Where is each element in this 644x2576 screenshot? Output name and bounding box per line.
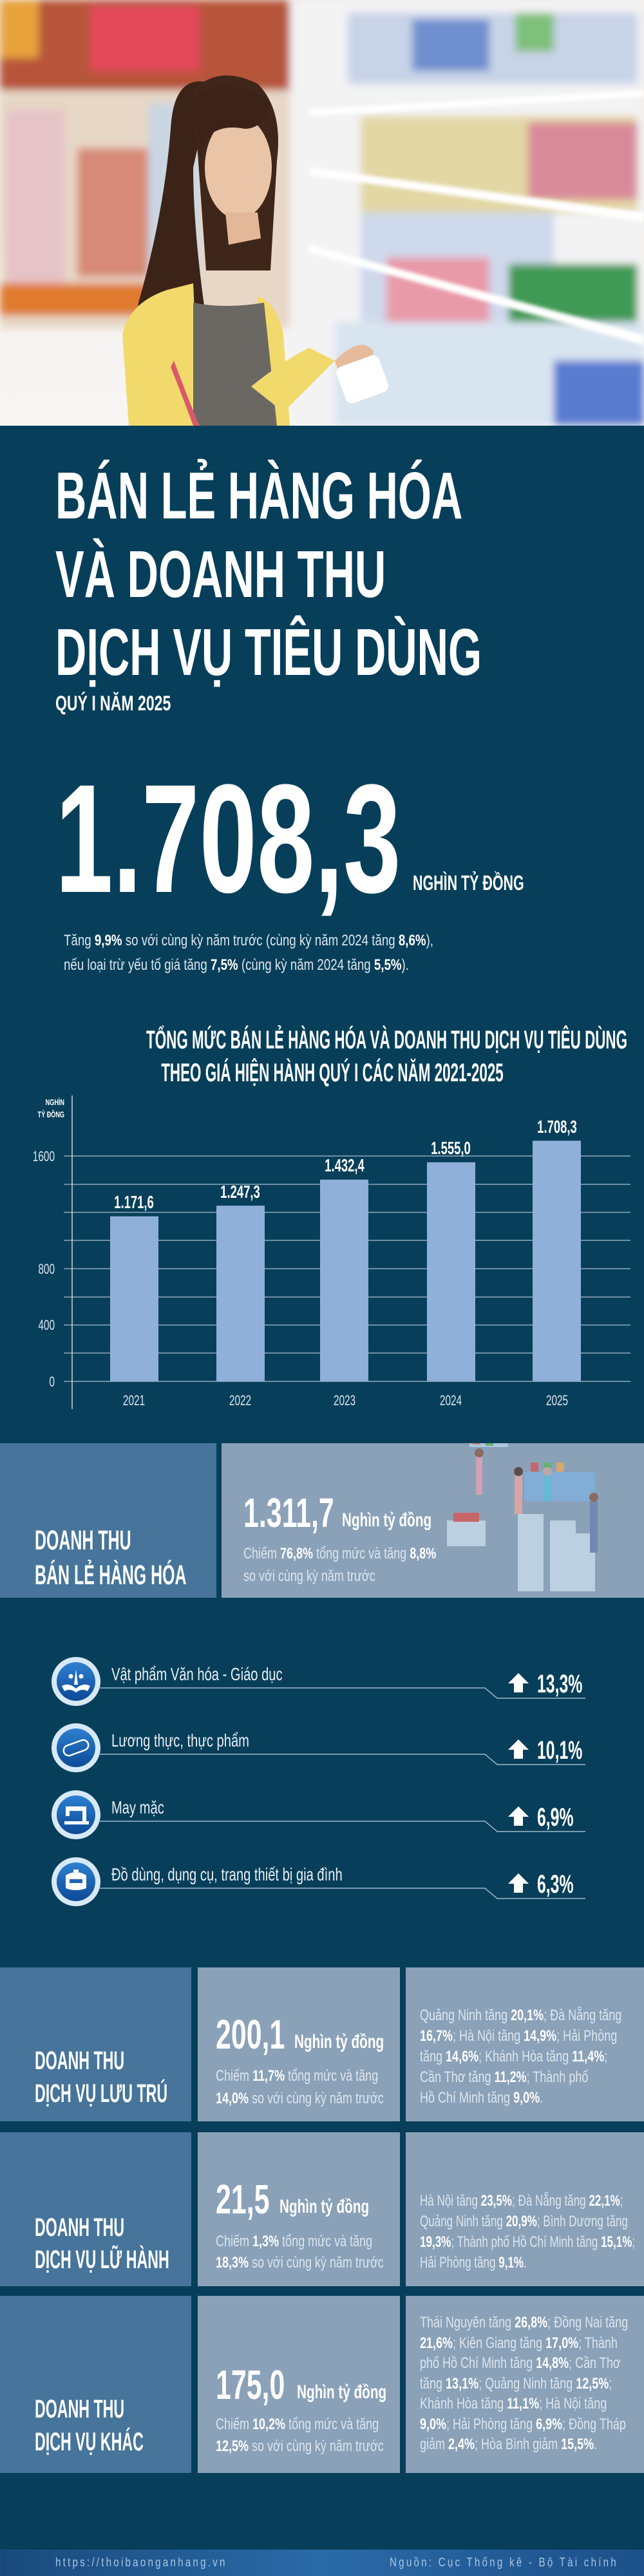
value labels: 1.247,3 <box>220 1182 260 1202</box>
y labels: 1600 <box>33 1149 55 1165</box>
title <box>55 459 482 689</box>
value labels: 1.555,0 <box>431 1139 471 1159</box>
description: so với cùng kỳ năm trước <box>243 1567 375 1585</box>
item list: retail categories <box>52 1657 585 1906</box>
panel: travel provinces: Hà Nội tăng 23,5%; Đà Nẵng tăng 22,1%; <box>420 2192 623 2210</box>
panel: travel figure: 18,3% so với cùng kỳ năm trước <box>216 2254 384 2271</box>
panel: accommodation title: DOANH THU <box>35 2047 124 2075</box>
woman <box>122 75 390 426</box>
value labels <box>114 1117 577 1213</box>
panel: accommodation figure: 14,0% so với cùng kỳ năm trước <box>216 2090 384 2107</box>
item labels: Vật phẩm Văn hóa - Giáo dục <box>111 1664 283 1684</box>
hero photo: woman shopping in supermarket <box>0 0 644 426</box>
panel: other services provinces: tăng 13,1%; Quảng Ninh tăng 12,5%; <box>420 2375 612 2392</box>
title: BÁN LẺ HÀNG HÓA <box>55 459 462 533</box>
panel: other services title <box>0 2296 191 2473</box>
y labels: 0 <box>49 1374 55 1390</box>
chart title <box>146 1025 627 1087</box>
title: VÀ DOANH THU <box>55 537 386 611</box>
year labels: 2023 <box>334 1393 355 1409</box>
panel: accommodation title <box>0 1967 191 2121</box>
growth note <box>64 932 433 974</box>
panel: other services figure: 175,0 <box>216 2362 285 2408</box>
year labels <box>123 1393 568 1409</box>
panel: other services figure: Nghìn tỷ đồng <box>297 2382 386 2403</box>
bars <box>110 1141 581 1381</box>
panel: other services provinces: 9,0%; Hải Phòng tăng 6,9%; Đồng Tháp <box>420 2415 626 2433</box>
item 1 <box>52 1657 585 1706</box>
item 2 <box>52 1723 585 1772</box>
axis unit: TỶ ĐỒNG <box>38 1110 64 1119</box>
value labels: 1.432,4 <box>325 1156 365 1176</box>
item 3 <box>52 1790 585 1839</box>
panel: accommodation provinces: tăng 14,6%; Khánh Hòa tăng 11,4%; <box>420 2048 607 2065</box>
panel: other services provinces: Thái Nguyên tăng 26,8%; Đồng Nai tăng <box>420 2314 628 2331</box>
panel: travel title <box>0 2132 191 2286</box>
panel: accommodation figure: Chiếm 11,7% tổng mức và tăng <box>216 2067 378 2085</box>
panel: travel provinces: 19,3%; Thành phố Hồ Chí Minh tăng 15,1%; <box>420 2233 635 2251</box>
subtitle: QUÝ I NĂM 2025 <box>55 692 171 715</box>
panel: retail revenue title: DOANH THU <box>35 1525 131 1556</box>
description <box>243 1545 436 1585</box>
panel: travel provinces: Quảng Ninh tăng 20,9%; Bình Dương tăng <box>420 2213 628 2230</box>
panel: other services figure <box>198 2296 400 2473</box>
figure: 1.311,7 <box>243 1490 334 1536</box>
y labels: 400 <box>38 1318 55 1334</box>
panel: retail revenue title <box>0 1443 216 1598</box>
bar chart <box>33 1095 630 1409</box>
panel: other services provinces <box>406 2296 644 2473</box>
item list: retail categories: 6,9% <box>537 1803 574 1832</box>
item percentages: 13,3% <box>537 1670 582 1698</box>
item list: retail categories: May mặc <box>111 1797 164 1817</box>
year labels: 2025 <box>546 1393 568 1409</box>
panel: other services provinces: Khánh Hòa tăng 11,1%; Hà Nội tăng <box>420 2395 607 2412</box>
chart title: THEO GIÁ HIỆN HÀNH QUÝ I CÁC NĂM 2021-2025 <box>161 1059 504 1087</box>
big number: 1.708,3 <box>55 752 401 925</box>
panel: accommodation provinces: Quảng Ninh tăng 20,1%; Đà Nẵng tăng <box>420 2007 621 2024</box>
headline figure <box>55 752 524 925</box>
year labels: 2021 <box>123 1393 145 1409</box>
panel: retail revenue title: BÁN LẺ HÀNG HÓA <box>35 1560 187 1591</box>
footer: source: Nguồn: Cục Thống kê - Bộ Tài chính <box>390 2556 618 2570</box>
unit: NGHÌN TỶ ĐỒNG <box>413 871 524 895</box>
item list: retail categories: Đồ dùng, dụng cụ, trang thiết bị gia đình <box>111 1864 343 1884</box>
panel: travel provinces: Hải Phòng tăng 9,1%. <box>420 2254 527 2271</box>
year labels: 2022 <box>229 1393 251 1409</box>
panel: travel figure: 21,5 <box>216 2176 269 2222</box>
footer: website: https://thoibaonganhang.vn <box>55 2556 227 2570</box>
description: Chiếm 76,8% tổng mức và tăng 8,8% <box>243 1545 436 1562</box>
panel: travel figure <box>198 2132 400 2286</box>
growth note: nếu loại trừ yếu tố giá tăng 7,5% (cùng kỳ năm 2024 tăng 5,5%). <box>64 956 409 974</box>
panel: other services figure: 12,5% so với cùng kỳ năm trước <box>216 2438 384 2455</box>
y labels <box>33 1149 55 1390</box>
y labels: 800 <box>38 1262 55 1278</box>
value labels: 1.708,3 <box>537 1117 577 1137</box>
axis unit: NGHÌN <box>46 1097 64 1107</box>
panel: travel figure: Chiếm 1,3% tổng mức và tăng <box>216 2233 372 2250</box>
year labels: 2024 <box>440 1393 462 1409</box>
panel: accommodation title: DỊCH VỤ LƯU TRÚ <box>35 2079 167 2108</box>
panel: other services provinces: 21,6%; Kiên Giang tăng 17,0%; Thành <box>420 2334 618 2352</box>
panel: accommodation provinces: 16,7%; Hà Nội tăng 14,9%; Hải Phòng <box>420 2027 617 2045</box>
panel: other services provinces: giảm 2,4%; Hòa Bình giảm 15,5%. <box>420 2436 597 2453</box>
panel: retail revenue figure <box>222 1443 644 1598</box>
title: DỊCH VỤ TIÊU DÙNG <box>55 615 482 689</box>
axis unit <box>38 1097 64 1119</box>
item list: retail categories: 6,3% <box>537 1870 574 1899</box>
panel: accommodation figure: Nghìn tỷ đồng <box>294 2031 384 2052</box>
panel: other services title: DỊCH VỤ KHÁC <box>35 2428 144 2456</box>
panel: travel title: DOANH THU <box>35 2213 124 2242</box>
value labels: 1.171,6 <box>114 1193 154 1213</box>
panel: travel provinces <box>406 2132 644 2286</box>
panel: travel figure: Nghìn tỷ đồng <box>279 2196 369 2217</box>
panel: travel title: DỊCH VỤ LỮ HÀNH <box>35 2246 169 2274</box>
illustration: store <box>447 1443 598 1591</box>
panel: accommodation provinces: Hồ Chí Minh tăng 9,0%. <box>420 2089 543 2107</box>
chart title: TỔNG MỨC BÁN LẺ HÀNG HÓA VÀ DOANH THU DỊCH VỤ TIÊU DÙNG <box>146 1026 627 1054</box>
panel: other services figure: Chiếm 10,2% tổng mức và tăng <box>216 2416 379 2433</box>
footer <box>0 2550 644 2576</box>
panel: accommodation provinces <box>406 1967 644 2121</box>
growth note: Tăng 9,9% so với cùng kỳ năm trước (cùng kỳ năm 2024 tăng 8,6%), <box>64 932 433 949</box>
panel: accommodation figure: 200,1 <box>216 2011 285 2058</box>
panel: accommodation provinces: Cần Thơ tăng 11,2%; Thành phố <box>420 2069 588 2086</box>
item list: retail categories: Lương thực, thực phẩm <box>111 1730 249 1750</box>
panel: other services title: DOANH THU <box>35 2395 124 2423</box>
panel: other services provinces: phố Hồ Chí Minh tăng 14,8%; Cần Thơ <box>420 2354 621 2372</box>
unit: Nghìn tỷ đồng <box>342 1510 431 1531</box>
item 4 <box>52 1857 585 1906</box>
panel: accommodation figure <box>198 1967 400 2121</box>
item list: retail categories: 10,1% <box>537 1736 582 1765</box>
